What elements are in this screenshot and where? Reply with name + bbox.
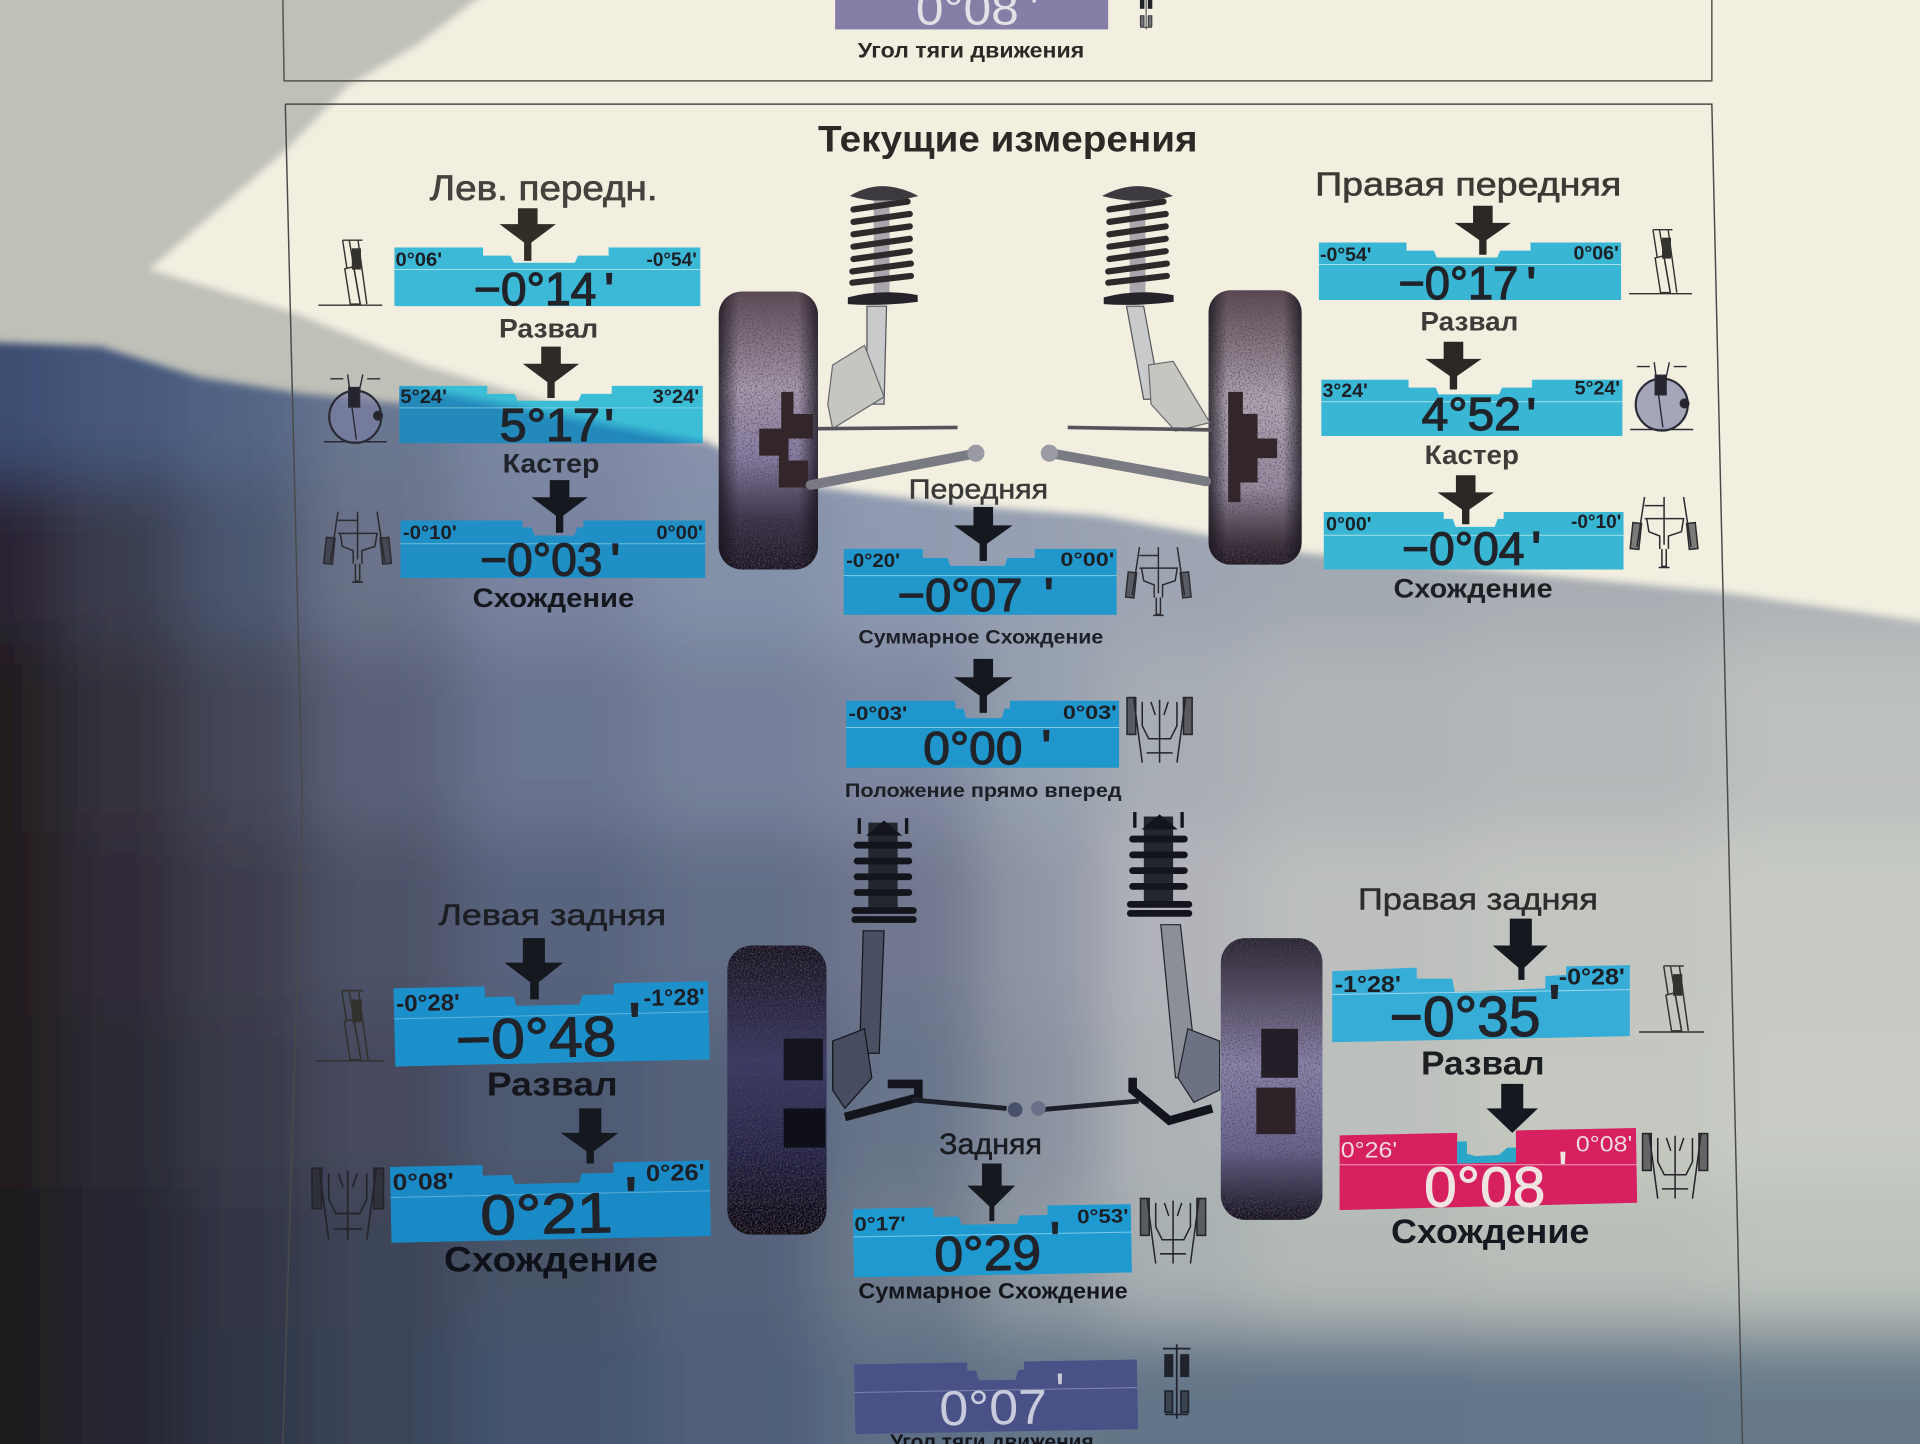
- gauge: thrust angle: ': [1055, 1364, 1065, 1418]
- gauge: front total toe: −0°07: [898, 569, 1022, 621]
- panel: right front: [1315, 166, 1698, 603]
- gauge: left front camber: [394, 208, 700, 315]
- icon: rear total toe: [1141, 1198, 1206, 1264]
- arrow: right rear toe: [1487, 1084, 1538, 1133]
- heading: left rear: Левая задняя: [438, 899, 666, 932]
- icon: right rear toe: [1643, 1134, 1708, 1199]
- gauge: top thrust angle: [835, 0, 1108, 34]
- gauge: right front caster: 4°52: [1422, 388, 1521, 440]
- gauge: left rear toe: 0°26': [646, 1159, 705, 1186]
- gauge: right front toe: ': [1531, 521, 1542, 573]
- illustration: front suspension: [719, 186, 1302, 570]
- gauge: right rear toe: [1340, 1128, 1637, 1218]
- wheel: front right: [1209, 290, 1302, 565]
- gauge: left front caster: [399, 347, 703, 451]
- gauge: left front toe: [400, 480, 705, 586]
- gauge: rear total toe: ': [1049, 1212, 1061, 1267]
- icon: left rear camber: [316, 991, 385, 1061]
- label: right rear camber: Развал: [1421, 1046, 1545, 1083]
- gauge: left front caster: 5°24': [400, 386, 447, 408]
- gauge: left front camber: ': [604, 263, 615, 315]
- icon: left rear toe: [312, 1168, 383, 1240]
- label: top thrust angle: Угол тяги движения: [858, 40, 1084, 63]
- icon: left front caster: [324, 374, 387, 443]
- label: left front toe: Схождение: [473, 583, 634, 613]
- gauge: right front camber: [1319, 206, 1621, 309]
- gauge: rear total toe: 0°53': [1077, 1205, 1129, 1228]
- label: straight ahead: Положение прямо вперед: [845, 780, 1122, 802]
- label: left front caster: Кастер: [503, 448, 599, 478]
- gauge: straight ahead: ': [1041, 720, 1052, 772]
- wheel: rear right: [1221, 938, 1322, 1220]
- gauge: right front caster: [1321, 342, 1622, 440]
- arrow: left rear toe: [561, 1108, 618, 1164]
- panel: left rear: [312, 899, 711, 1279]
- label: front total toe: Суммарное Схождение: [858, 627, 1103, 649]
- icon: right front camber: [1629, 230, 1692, 294]
- gauge: front total toe: [844, 507, 1117, 621]
- label: right front toe: Схождение: [1393, 573, 1553, 603]
- panel: right rear: [1332, 883, 1708, 1251]
- wheel: rear left: [727, 946, 827, 1235]
- icon: thrust angle: [1163, 1344, 1191, 1419]
- gauge: rear total toe: 0°17': [854, 1213, 906, 1236]
- frame: current measurements border: [283, 104, 1742, 1444]
- label: right front caster: Кастер: [1425, 440, 1519, 470]
- gauge: right rear toe: ': [1558, 1139, 1568, 1202]
- gauge: left front camber: -0°54': [647, 249, 697, 271]
- heading: right front: Правая передняя: [1315, 166, 1621, 203]
- gauge: right rear camber: ': [1548, 973, 1561, 1036]
- label: rear total toe: Суммарное Схождение: [858, 1279, 1128, 1304]
- gauge: left rear camber: -1°28': [643, 983, 705, 1011]
- gauge: right front toe: -0°10': [1571, 511, 1621, 533]
- gauge: thrust angle: 0°07: [939, 1380, 1048, 1436]
- icon: right front caster: [1630, 362, 1693, 431]
- gauge: left rear toe: [390, 1159, 711, 1249]
- icon: right front toe: [1630, 497, 1698, 567]
- label: left front camber: Развал: [499, 314, 598, 344]
- label: left rear toe: Схождение: [444, 1239, 658, 1279]
- gauge: left front camber: 0°06': [396, 249, 442, 271]
- gauge: left rear camber: −0°48: [455, 1004, 617, 1071]
- strut: rear right: [1031, 812, 1220, 1121]
- gauge: right front camber: −0°17: [1398, 257, 1518, 309]
- icon: straight ahead: [1127, 698, 1192, 763]
- strut: front left: [811, 186, 984, 485]
- gauge: left rear toe: 0°21: [480, 1181, 613, 1247]
- icon: front total toe: [1126, 547, 1191, 615]
- gauge: left front toe: ': [610, 534, 621, 586]
- strut: front right: [1041, 186, 1212, 481]
- gauge: left front toe: −0°03: [480, 534, 602, 586]
- gauge: right front caster: 3°24': [1322, 380, 1368, 402]
- gauge: left rear camber: [393, 981, 710, 1073]
- gauge: right rear toe: 0°08': [1576, 1131, 1632, 1156]
- arrow: left rear camber: [504, 938, 563, 999]
- gauge: left front caster: ': [604, 399, 615, 451]
- heading: left front: Лев. передн.: [430, 168, 658, 208]
- gauge: right rear toe: 0°08: [1424, 1155, 1545, 1218]
- gauge: front total toe: ': [1043, 568, 1054, 620]
- gauge: straight ahead: 0°03': [1063, 702, 1117, 724]
- arrow: rear total toe: [967, 1164, 1015, 1221]
- gauge: right rear camber: -0°28': [1559, 964, 1625, 990]
- gauge: front total toe: -0°20': [846, 550, 900, 572]
- gauge: right front toe: [1324, 475, 1624, 575]
- gauge: right front toe: 0°00': [1326, 513, 1371, 535]
- gauge: right front caster: ': [1526, 388, 1537, 440]
- title: Текущие измерения: [818, 118, 1198, 159]
- gauge: rear total toe: [853, 1204, 1132, 1283]
- gauge: straight ahead: [846, 659, 1119, 774]
- panel: left front: [318, 168, 705, 613]
- gauge: front total toe: 0°00': [1060, 549, 1114, 571]
- gauge: left rear toe: 0°08': [392, 1168, 454, 1195]
- label: front axle: Передняя: [909, 474, 1048, 505]
- gauge: left front toe: -0°10': [403, 522, 457, 544]
- gauge: right front caster: 5°24': [1575, 377, 1620, 399]
- gauge: straight ahead: -0°03': [849, 703, 907, 725]
- gauge: rear total toe: 0°29: [934, 1226, 1041, 1282]
- arrow: right rear camber: [1493, 919, 1548, 980]
- gauge: right front camber: 0°06': [1573, 243, 1619, 265]
- gauge: left rear camber: -0°28': [396, 989, 460, 1016]
- gauge: right rear camber: −0°35: [1390, 985, 1540, 1048]
- illustration: rear suspension: [727, 812, 1322, 1235]
- gauge: left rear camber: ': [627, 990, 642, 1054]
- label: right rear toe: Схождение: [1391, 1213, 1589, 1251]
- strut: rear left: [833, 818, 1022, 1117]
- gauge: straight ahead: 0°00: [923, 722, 1022, 774]
- heading: right rear: Правая задняя: [1358, 883, 1598, 917]
- icon: left front camber: [318, 240, 382, 305]
- label: right front camber: Развал: [1420, 306, 1518, 336]
- icon: left front toe: [324, 512, 391, 582]
- icon: top thrust: [1139, 0, 1153, 29]
- gauge: right rear camber: -1°28': [1335, 971, 1401, 997]
- gauge: right front toe: −0°04: [1402, 523, 1524, 575]
- gauge: right front camber: ': [1526, 257, 1537, 309]
- gauge: left front caster: 3°24': [653, 386, 699, 408]
- label: rear axle: Задняя: [939, 1128, 1042, 1161]
- wheel: front left: [719, 291, 818, 570]
- gauge: left front caster: 5°17: [500, 399, 600, 451]
- label: left rear camber: Развал: [487, 1066, 618, 1103]
- gauge: right rear toe: 0°26': [1341, 1137, 1397, 1162]
- gauge: right front camber: -0°54': [1320, 244, 1371, 266]
- gauge: left front camber: −0°14: [474, 263, 596, 315]
- gauge: thrust angle: [854, 1359, 1138, 1438]
- gauge: right rear camber: [1332, 964, 1630, 1048]
- icon: right rear camber: [1639, 966, 1704, 1032]
- frame: upper section border: [283, 0, 1712, 81]
- gauge: left front toe: 0°00': [656, 522, 703, 544]
- gauge: left rear toe: ': [624, 1165, 638, 1228]
